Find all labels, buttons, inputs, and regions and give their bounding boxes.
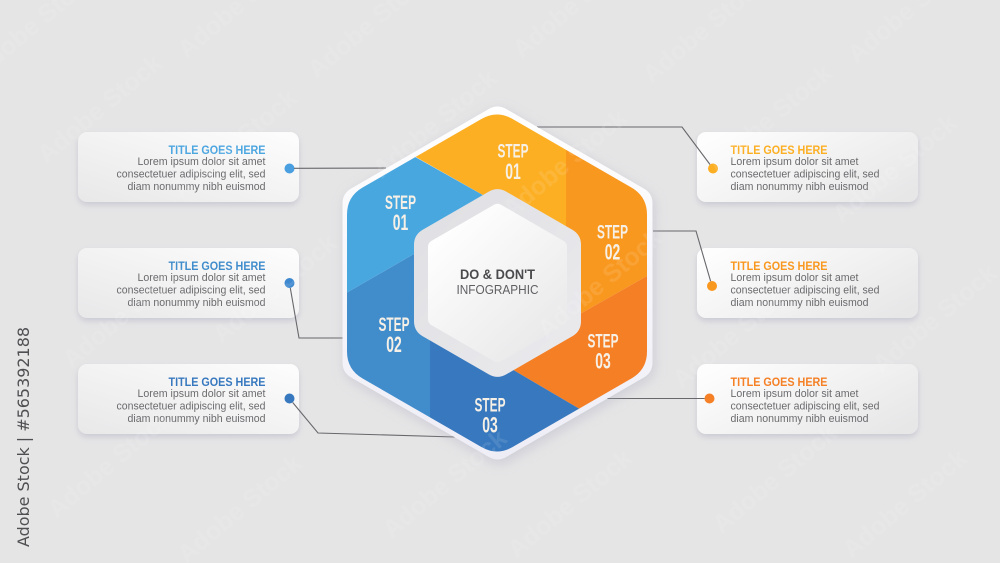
icon: right dot 2 (707, 281, 717, 291)
centre subtitle: INFOGRAPHIC (456, 283, 538, 297)
text block: right card 2: consectetuer adipiscing elit, sed (730, 284, 880, 296)
text block: right card 1: diam nonummy nibh euismod (730, 181, 868, 193)
watermarks: Adobe Stock (867, 259, 1000, 379)
text block: right card 2: Lorem ipsum dolor sit amet (730, 272, 858, 284)
panel: left card 1 (78, 132, 299, 202)
connector lines (290, 127, 711, 437)
panel: left card 3 (78, 364, 299, 434)
text block: left card 2: consectetuer adipiscing elit, sed (116, 284, 266, 296)
text block: left card 3 (116, 388, 266, 425)
text block: right card 1: Lorem ipsum dolor sit amet (730, 156, 858, 168)
text block: left card 2 (116, 272, 266, 309)
text block: right card 3: diam nonummy nibh euismod (730, 413, 868, 425)
text block: left card 1: diam nonummy nibh euismod (128, 181, 266, 193)
label: orange step 03: 03 (595, 348, 611, 374)
watermarks: Adobe Stock (377, 424, 512, 544)
heading: right card 1: TITLE GOES HERE (730, 143, 828, 157)
icon: left dot 1 (284, 164, 294, 174)
label: blue step 03: STEP (474, 396, 506, 417)
watermarks: Adobe Stock (57, 254, 192, 374)
watermarks: Adobe Stock (837, 444, 972, 563)
label: blue step 03 (474, 396, 506, 438)
label: blue step 02: STEP (378, 315, 410, 336)
text block: left card 3: consectetuer adipiscing elit, sed (116, 400, 266, 412)
watermarks: Adobe Stock (707, 419, 842, 539)
text block: left card 2: diam nonummy nibh euismod (128, 297, 266, 309)
watermarks: Adobe Stock (42, 404, 177, 524)
icon: left dot 2 (284, 278, 294, 288)
watermarks: Adobe Stock (32, 49, 167, 169)
watermarks: Adobe Stock (667, 274, 802, 394)
watermarks: Adobe Stock (367, 64, 502, 184)
text block: left card 1: Lorem ipsum dolor sit amet (138, 156, 266, 168)
watermarks: Adobe Stock (497, 104, 632, 224)
label: orange step 03: STEP (588, 332, 619, 353)
stock id text: Adobe Stock | #565392188 (14, 327, 33, 547)
text block: left card 1 (116, 156, 266, 193)
label: yellow step 01 (498, 142, 529, 184)
label: orange step 02: 02 (605, 240, 620, 264)
label: blue step 01 (385, 193, 416, 235)
label: blue step 02 (378, 315, 410, 357)
label: blue step 03: 03 (482, 413, 498, 438)
text block: right card 1 (730, 156, 880, 193)
centre title: DO & DON'T (460, 267, 536, 282)
icon: left dot 3 (284, 394, 294, 404)
watermarks: Adobe Stock (207, 229, 342, 349)
heading: right card 2: TITLE GOES HERE (730, 259, 828, 273)
text block: right card 3: Lorem ipsum dolor sit amet (730, 388, 858, 400)
hexagon chart (340, 100, 660, 470)
label: orange step 03 (588, 332, 619, 374)
watermarks: Adobe Stock (702, 59, 837, 179)
watermarks: Adobe Stock (532, 224, 667, 344)
text block: right card 2 (730, 272, 880, 309)
panel: left card 2 (78, 248, 299, 318)
label: orange step 02 (597, 223, 628, 264)
text block: right card 1: consectetuer adipiscing elit, sed (730, 168, 880, 180)
text block: left card 1: consectetuer adipiscing elit, sed (116, 168, 266, 180)
text block: right card 3 (730, 388, 880, 425)
centre white hexagon (428, 204, 567, 362)
heading: left card 2: TITLE GOES HERE (168, 259, 266, 273)
text block: right card 3: consectetuer adipiscing elit, sed (730, 400, 880, 412)
watermarks: Adobe Stock (827, 109, 962, 229)
icon: right dot 1 (708, 164, 718, 174)
text block: left card 3: diam nonummy nibh euismod (128, 413, 266, 425)
heading: left card 1: TITLE GOES HERE (168, 143, 266, 157)
panel: right card 3 (697, 364, 918, 434)
centre ring hexagon (414, 189, 581, 377)
label: yellow step 01: 01 (505, 159, 521, 184)
panel: right card 1 (697, 132, 918, 202)
icon: right dot 3 (704, 394, 714, 404)
watermarks: Adobe Stock (502, 444, 637, 563)
text block: right card 2: diam nonummy nibh euismod (730, 297, 868, 309)
label: blue step 02: 02 (386, 332, 402, 357)
label: orange step 02: STEP (597, 223, 628, 244)
label: yellow step 01: STEP (498, 142, 529, 163)
label: blue step 01: 01 (393, 210, 408, 235)
label: blue step 01: STEP (385, 193, 416, 214)
heading: right card 3: TITLE GOES HERE (730, 375, 828, 389)
watermarks: Adobe Stock (167, 84, 302, 204)
text block: left card 2: Lorem ipsum dolor sit amet (138, 272, 266, 284)
coloured segments (347, 114, 647, 452)
text block: left card 3: Lorem ipsum dolor sit amet (138, 388, 266, 400)
heading: left card 3: TITLE GOES HERE (168, 375, 266, 389)
panel: right card 2 (697, 248, 918, 318)
outer white hexagon (342, 106, 652, 460)
